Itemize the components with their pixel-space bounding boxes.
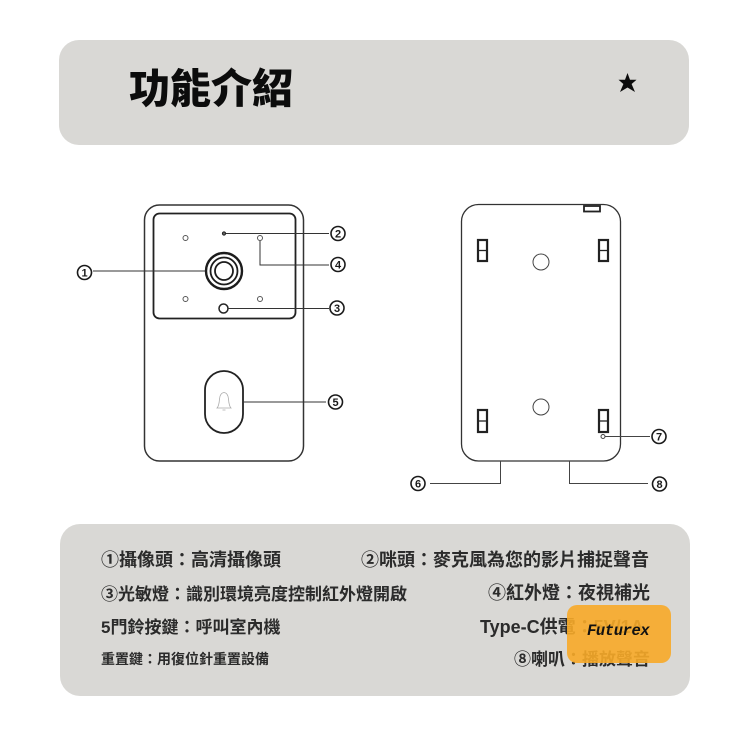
text: infrared: ④紅外燈：夜視補光: [488, 583, 650, 603]
callout numbers: [411, 430, 666, 491]
badge text: Futurex: [587, 622, 649, 640]
diagram: doorbell front: 3: [334, 303, 340, 315]
camera lens: [206, 253, 242, 289]
text: reset: 重置鍵：用復位針重置設備: [101, 651, 269, 667]
text: door button: 5門鈴按鍵：呼叫室內機: [101, 618, 280, 637]
small LEDs: [183, 236, 262, 302]
screw holes: [533, 254, 605, 438]
badge: Futurex watermark: [567, 605, 671, 663]
diagram: doorbell back: 7: [656, 432, 662, 444]
diagram: doorbell front: 2: [335, 228, 341, 240]
diagram: doorbell back: [410, 204, 668, 492]
leader lines: [430, 436, 650, 484]
icon: bell: [217, 392, 231, 410]
back plate: [462, 204, 620, 461]
callout numbers: [78, 226, 345, 409]
text: camera: ①攝像頭：高清攝像頭: [101, 550, 281, 570]
panel: title band: [59, 40, 689, 145]
mounting clips: [478, 240, 608, 432]
text: microphone: ②咪頭：麥克風為您的影片捕捉聲音: [361, 550, 649, 570]
diagram: doorbell front: 4: [335, 260, 342, 272]
device body: [144, 205, 304, 461]
text: power: Type-C供電：5V/1A: [480, 617, 644, 637]
reset slot: [584, 206, 600, 212]
diagram: doorbell front: 1: [81, 268, 88, 280]
diagram: doorbell front: [76, 204, 346, 462]
icon: star mark: [618, 73, 636, 92]
leader lines: [93, 234, 329, 402]
camera panel: [154, 214, 296, 318]
diagram: doorbell front: 5: [332, 397, 339, 409]
heading: 功能介紹: [129, 66, 293, 112]
text: light sensor: ③光敏燈：識別環境亮度控制紅外燈開啟: [101, 585, 407, 604]
doorbell button: [205, 371, 243, 433]
diagram: doorbell back: 6: [415, 478, 421, 490]
light sensor: [219, 304, 228, 313]
diagram: doorbell back: 8: [656, 479, 663, 491]
text: speaker: ⑧喇叭：播放聲音: [514, 650, 650, 669]
microphone hole: [222, 232, 226, 235]
panel: feature descriptions: [60, 524, 690, 696]
